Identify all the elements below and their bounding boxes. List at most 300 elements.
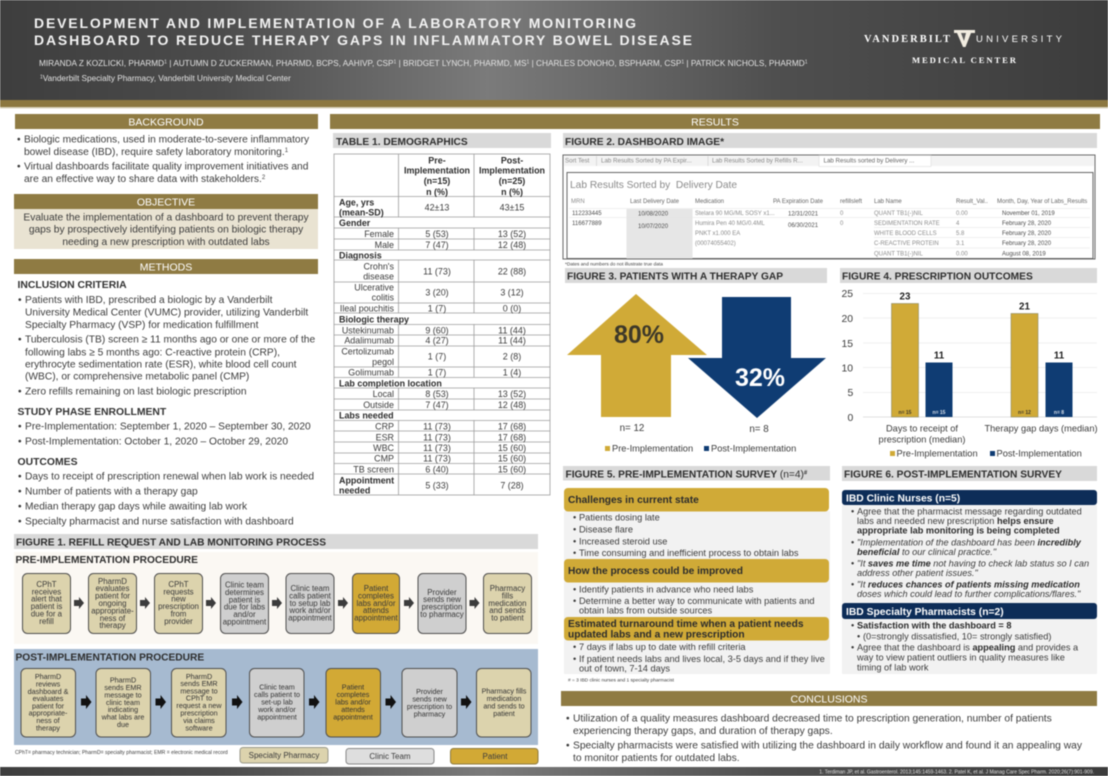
step 1: due for a bbox=[31, 610, 63, 618]
demographics table: colitis bbox=[372, 292, 395, 302]
arrow bbox=[404, 597, 414, 609]
demographics table: Labs needed bbox=[339, 410, 394, 420]
step 6: sends new bbox=[412, 694, 447, 703]
demographics table: TB screen bbox=[353, 464, 394, 474]
dashboard screenshot: 12/31/2021 bbox=[788, 212, 819, 218]
dashboard screenshot: 0.00 bbox=[956, 211, 968, 217]
step 1: reviews bbox=[36, 679, 61, 688]
demographics table: 4 (27) bbox=[425, 336, 449, 346]
study phase list: Pre-Implementation: September 1, 2020 – September 30, 2020 bbox=[25, 422, 311, 432]
step 3 bbox=[154, 574, 202, 634]
step 6: appointment bbox=[354, 614, 399, 623]
objective text: Evaluate the implementation of a dashboard to prevent therapy bbox=[23, 212, 309, 224]
step 3: via claims bbox=[183, 716, 215, 725]
arrow bbox=[232, 695, 242, 709]
demographics table: (mean-SD) bbox=[339, 208, 384, 218]
authors: 1 bbox=[527, 60, 530, 66]
background text: Virtual dashboards facilitate quality improvement initiatives and bbox=[24, 162, 309, 172]
demographics table: pegol bbox=[372, 357, 394, 367]
band: improvement bbox=[564, 559, 829, 582]
step 6: prescription to bbox=[407, 702, 452, 711]
step 1 bbox=[22, 574, 70, 634]
arrow bbox=[206, 597, 216, 609]
arrow bbox=[74, 597, 84, 609]
clinic nurses feedback: "It saves me time not having to check lab status so I can bbox=[857, 558, 1089, 568]
authors: 1 bbox=[681, 60, 684, 66]
bar chart: 25 bbox=[842, 289, 853, 300]
demographics table: WBC bbox=[373, 443, 395, 453]
step 4: Clinic team bbox=[225, 580, 264, 590]
heading: background: BACKGROUND bbox=[128, 116, 204, 128]
improvement list: • bbox=[573, 584, 576, 594]
demographics table: 17 (68) bbox=[498, 432, 526, 442]
dashboard screenshot: February 28, 2020 bbox=[1002, 241, 1052, 247]
demographics table: 7 (28) bbox=[500, 480, 524, 490]
turnaround list: out of town, 7-14 days bbox=[579, 664, 670, 674]
step 5: work and/or bbox=[288, 606, 331, 615]
dashboard screenshot: MRN bbox=[571, 199, 585, 205]
legend: process roles bbox=[240, 748, 538, 764]
panel: figure 4 prescription outcomes bbox=[840, 268, 1098, 458]
bar chart: 23 bbox=[900, 292, 911, 302]
step 1: appropriate- bbox=[29, 709, 68, 718]
bar chart: 20 bbox=[842, 314, 853, 325]
conclusions text: experiencing therapy gaps, and duration of therapy gaps. bbox=[573, 726, 833, 737]
challenges list: Disease flare bbox=[579, 524, 633, 534]
step 1: refill bbox=[39, 617, 54, 626]
clinic nurses feedback: "Implementation of the dashboard has been incredibly bbox=[857, 538, 1082, 548]
step 7: patient bbox=[493, 709, 515, 718]
heading: conclusions: CONCLUSIONS bbox=[790, 694, 868, 706]
clinic nurses feedback: • bbox=[851, 580, 854, 590]
outcomes list: Median therapy gap days while awaiting lab work bbox=[25, 502, 248, 512]
authors: | CHARLES DONOHO, BSPHARM, CSP bbox=[529, 59, 682, 68]
demographics table: n (%) bbox=[501, 187, 523, 197]
specialty pharmacists feedback: (0=strongly dissatisfied, 10= strongly satisfied) bbox=[863, 632, 1051, 642]
legend: process roles: Clinic Team bbox=[369, 752, 411, 761]
step 3: CPhT bbox=[168, 580, 189, 589]
step 6: Patient bbox=[364, 584, 389, 593]
bar chart: prescription (median) bbox=[879, 434, 965, 444]
band: clinic nurses bbox=[842, 490, 1097, 505]
step 5: calls patient bbox=[289, 591, 332, 600]
heading: methods: METHODS bbox=[140, 262, 192, 274]
band: challenges: Challenges in current state bbox=[568, 495, 699, 506]
demographics table: 13 (52) bbox=[498, 389, 526, 399]
step 4: work and/or bbox=[257, 705, 296, 714]
demographics table: (n=25) bbox=[499, 176, 525, 186]
clinic nurses feedback: • bbox=[851, 506, 854, 516]
specialty pharmacists feedback: Satisfaction with the dashboard = 8 bbox=[857, 620, 1011, 630]
demographics table: 3 (12) bbox=[500, 288, 524, 298]
demographics table: 12 (48) bbox=[498, 240, 526, 250]
step 8 bbox=[484, 574, 532, 634]
step 5: appointment bbox=[288, 614, 333, 623]
inclusion criteria list: • bbox=[18, 386, 22, 398]
step 7: Pharmacy fills bbox=[482, 687, 527, 696]
demographics table: Pre- bbox=[428, 156, 446, 166]
affiliation: 1 bbox=[40, 74, 43, 80]
challenges list: Time consuming and inefficient process to obtain labs bbox=[579, 548, 799, 558]
bar chart: 5 bbox=[848, 388, 854, 399]
step 6: pharmacy bbox=[414, 709, 446, 718]
step 5 bbox=[286, 574, 334, 634]
bar chart: 10 bbox=[842, 364, 853, 374]
challenges list: • bbox=[573, 536, 576, 546]
dashboard screenshot: 5.8 bbox=[956, 231, 965, 237]
n label post: n= 8 bbox=[749, 424, 769, 435]
turnaround list: 7 days if labs up to date with refill criteria bbox=[579, 642, 746, 652]
demographics table: (n=15) bbox=[424, 176, 450, 186]
legend: figure 4: Pre-Implementation bbox=[896, 448, 978, 458]
panel: results heading bbox=[330, 114, 1100, 129]
dashboard screenshot: Last Delivery Date bbox=[630, 199, 680, 205]
bar chart: n= 8 bbox=[1054, 410, 1064, 416]
challenges list bbox=[573, 512, 799, 558]
step 8: to patient bbox=[491, 614, 525, 623]
conclusions text: Utilization of a quality measures dashboard decreased time to prescription generation, number of patients bbox=[573, 714, 1052, 724]
step 1: evaluates bbox=[33, 694, 64, 703]
arrow bbox=[272, 597, 282, 609]
step 1: patient for bbox=[32, 701, 65, 710]
title bbox=[34, 15, 692, 48]
logo: Vanderbilt University Medical Center: MEDICAL CENTER bbox=[912, 55, 1017, 65]
background text: • bbox=[17, 134, 21, 146]
demographics table: 9 (60) bbox=[425, 326, 449, 336]
demographics table: 11 (73) bbox=[423, 443, 451, 453]
dashboard screenshot: Lab Results Sorted by Refills R... bbox=[712, 158, 803, 164]
dashboard screenshot: Lab Results Sorted by Delivery Date bbox=[570, 180, 737, 191]
objective text: gaps by prospectively identifying patients on biologic therapy bbox=[29, 224, 304, 236]
step 4: Clinic team bbox=[259, 683, 295, 692]
dashboard footnote: *Dates and numbers do not illustrate true data bbox=[565, 262, 663, 268]
dashboard screenshot: February 28, 2020 bbox=[1002, 231, 1052, 237]
panel: figure 2 dashboard image bbox=[563, 133, 1097, 268]
title: DEVELOPMENT AND IMPLEMENTATION OF A LABORATORY MONITORING bbox=[34, 15, 636, 31]
background text: • bbox=[17, 162, 21, 172]
survey footnote: # = 3 IBD clinic nurses and 1 specialty pharmacist bbox=[568, 678, 675, 684]
demographics table: 1 (7) bbox=[428, 352, 446, 362]
step 4: set-up lab bbox=[261, 698, 293, 707]
demographics table: 15 (60) bbox=[498, 443, 526, 453]
panel: figure 3 patients with a therapy gap bbox=[565, 268, 827, 454]
affiliation: Vanderbilt Specialty Pharmacy, Vanderbilt University Medical Center bbox=[43, 74, 291, 83]
demographics table: Implementation bbox=[404, 166, 470, 176]
panel: background bbox=[15, 114, 318, 185]
conclusions text: to monitor patients for outdated labs. bbox=[573, 753, 740, 764]
arrow bbox=[386, 695, 396, 709]
demographics table: 43±15 bbox=[500, 202, 524, 212]
step 3: prescription bbox=[180, 708, 218, 718]
step 2: what labs are bbox=[101, 713, 144, 722]
heading: figure 3: FIGURE 3. PATIENTS WITH A THERAPY GAP bbox=[567, 272, 783, 282]
step 3: prescription bbox=[158, 602, 199, 611]
inclusion criteria list: (WBC), or comprehensive metabolic panel (CMP) bbox=[25, 372, 249, 382]
background text: Biologic medications, used in moderate-to-severe inflammatory bbox=[24, 134, 310, 146]
step 7 bbox=[418, 574, 466, 634]
step 2 bbox=[96, 668, 150, 737]
logo: Vanderbilt University Medical Center: VANDERBILT bbox=[864, 34, 950, 45]
demographics table: 7 (47) bbox=[425, 240, 449, 250]
step 1: ness of bbox=[36, 716, 60, 725]
step 5: appointment bbox=[333, 713, 373, 722]
step 4: determines bbox=[225, 588, 264, 597]
clinic nurses feedback: • bbox=[851, 558, 854, 568]
authors: 1 bbox=[394, 60, 397, 66]
outcomes list: Specialty pharmacist and nurse satisfaction with dashboard bbox=[25, 516, 294, 528]
inclusion criteria heading: INCLUSION CRITERIA bbox=[18, 280, 127, 291]
turnaround list: If patient needs labs and lives local, 3-5 days and if they live bbox=[579, 654, 825, 664]
icon: down arrow post-implementation 32% bbox=[688, 297, 826, 418]
demographics table: CRP bbox=[375, 422, 394, 432]
arrow bbox=[461, 695, 472, 709]
arrow bbox=[338, 597, 348, 609]
demographics table: 3 (20) bbox=[425, 288, 449, 298]
step 2: PharmD bbox=[98, 577, 127, 586]
band: challenges bbox=[564, 488, 829, 512]
demographics table: Adalimumab bbox=[344, 336, 394, 346]
legend: figure 3: Pre-Implementation bbox=[612, 444, 693, 454]
dashboard screenshot: refillsleft bbox=[840, 199, 862, 205]
clinic nurses feedback: labs and needed new prescription helps ensure bbox=[857, 516, 1054, 526]
demographics table: Male bbox=[375, 240, 394, 250]
outcomes list: • bbox=[18, 486, 22, 498]
authors: | PATRICK NICHOLS, PHARMD bbox=[684, 59, 805, 68]
outcomes list: • bbox=[18, 502, 22, 512]
demographics table: Lab completion location bbox=[339, 378, 442, 388]
demographics table: 6 (40) bbox=[425, 464, 449, 474]
step 3: PharmD bbox=[186, 672, 212, 681]
dashboard screenshot: QUANT TB1(-)NIL bbox=[874, 252, 923, 258]
panel: pre-implementation procedure bbox=[14, 552, 538, 644]
step 3: from bbox=[171, 610, 187, 618]
heading: figure 5: FIGURE 5. PRE-IMPLEMENTATION SURVEY (n=4) bbox=[566, 470, 804, 480]
band: turnaround: Estimated turnaround time when a patient needs bbox=[568, 619, 804, 630]
authors: MIRANDA Z KOZLICKI, PHARMD bbox=[39, 59, 164, 68]
demographics table: Golimumab bbox=[348, 368, 394, 378]
arrow bbox=[156, 695, 166, 709]
header banner bbox=[0, 0, 1108, 108]
step 3: message to bbox=[180, 686, 218, 695]
step 7 bbox=[476, 668, 531, 737]
step 2 bbox=[88, 574, 136, 634]
heading: post-implementation: POST-IMPLEMENTATION PROCEDURE bbox=[16, 652, 204, 664]
step 8: medication bbox=[488, 599, 527, 608]
background text: bowel disease (IBD), require safety laboratory monitoring. bbox=[24, 147, 285, 158]
dashboard screenshot: C-REACTIVE PROTEIN bbox=[874, 241, 939, 247]
dashboard screenshot: 112233445 bbox=[572, 211, 602, 217]
step 4: due for labs bbox=[224, 603, 265, 612]
dashboard screenshot bbox=[563, 155, 1095, 259]
clinic nurses feedback: beneficial to our clinical practice." bbox=[857, 547, 997, 557]
demographics table: Certolizumab bbox=[341, 346, 394, 356]
step 8: fills bbox=[502, 591, 513, 600]
step 1: patient is bbox=[31, 602, 62, 611]
demographics table: Ulcerative bbox=[354, 282, 394, 292]
demographics table: 7 (47) bbox=[425, 400, 449, 410]
legend: figure 3: Post-Implementation bbox=[711, 444, 796, 454]
legend: figure 3 bbox=[605, 444, 796, 454]
demographics table: 12 (48) bbox=[498, 400, 526, 410]
step 5: attends bbox=[341, 705, 365, 714]
dashboard screenshot: Medication bbox=[695, 199, 724, 205]
improvement list: Identify patients in advance who need labs bbox=[579, 584, 754, 594]
inclusion criteria list: • bbox=[18, 334, 22, 346]
dashboard screenshot: Lab Name bbox=[874, 199, 902, 205]
demographics table: Ileal pouchitis bbox=[340, 304, 395, 314]
challenges list: Patients dosing late bbox=[579, 512, 660, 522]
panel: figure 6 post-implementation survey bbox=[842, 466, 1097, 674]
dashboard screenshot: QUANT TB1(-)NIL bbox=[874, 211, 923, 217]
demographics table: CMP bbox=[374, 454, 394, 464]
improvement list bbox=[573, 584, 814, 616]
authors: | AUTUMN D ZUCKERMAN, PHARMD, BCPS, AAHIVP, CSP bbox=[167, 59, 394, 68]
demographics table: Local bbox=[373, 389, 394, 399]
demographics table: 5 (33) bbox=[425, 480, 449, 490]
step 2: therapy bbox=[99, 621, 126, 630]
demographics table: Crohn's bbox=[363, 262, 395, 272]
improvement list: obtain labs from outside sources bbox=[579, 606, 713, 616]
step 3: sends EMR bbox=[180, 679, 218, 688]
bar chart: n= 15 bbox=[899, 410, 912, 416]
step 7: medication bbox=[487, 694, 521, 703]
demographics table: 5 (53) bbox=[425, 229, 449, 239]
background text: are an effective way to share data with stakeholders. bbox=[24, 174, 262, 185]
dashboard screenshot: November 01, 2019 bbox=[1002, 211, 1055, 217]
conclusions text: • bbox=[566, 714, 570, 724]
demographics table: 11 (73) bbox=[423, 454, 451, 464]
turnaround list bbox=[573, 642, 825, 674]
bar chart: n= 12 bbox=[1018, 410, 1031, 416]
heading: figure 4: FIGURE 4. PRESCRIPTION OUTCOMES bbox=[842, 272, 1033, 282]
dashboard screenshot: 0 bbox=[840, 221, 844, 227]
demographics table: Age, yrs bbox=[339, 198, 374, 208]
step 3: software bbox=[185, 723, 213, 732]
footer with references bbox=[0, 767, 1108, 776]
band: clinic nurses: IBD Clinic Nurses (n=5) bbox=[846, 494, 960, 504]
improvement list: • bbox=[573, 596, 576, 606]
arrow bbox=[81, 695, 92, 709]
dashboard screenshot: Stelara 90 MG/ML SOSY x1... bbox=[695, 211, 775, 217]
panel: figure 1 refill process bbox=[14, 534, 538, 764]
step 4 bbox=[220, 574, 268, 634]
objective text: needing a new prescription with outdated labs bbox=[62, 237, 270, 248]
panel: post-implementation procedure bbox=[14, 649, 538, 745]
band: improvement: How the process could be improved bbox=[568, 566, 743, 577]
legend: figure 4 bbox=[890, 448, 1082, 458]
step 2: clinic team bbox=[106, 698, 140, 707]
demographics table: 1 (4) bbox=[503, 368, 521, 378]
conclusions text bbox=[566, 714, 1083, 764]
outcomes list: • bbox=[18, 516, 22, 528]
demographics table: 15 (60) bbox=[498, 464, 526, 474]
panel: objective bbox=[14, 194, 318, 249]
demographics table: n (%) bbox=[426, 187, 448, 197]
band: specialty pharmacists: IBD Specialty Pharmacists (n=2) bbox=[846, 607, 1004, 618]
dashboard screenshot: 116677889 bbox=[572, 221, 602, 227]
dashboard screenshot: August 08, 2019 bbox=[1002, 252, 1046, 258]
step 8: Pharmacy bbox=[490, 584, 525, 593]
specialty pharmacists feedback: • bbox=[857, 632, 860, 642]
specialty pharmacists feedback: way to view patient outliers in quality measures like bbox=[856, 652, 1065, 662]
demographics table: 11 (44) bbox=[498, 326, 526, 336]
demographics table: 8 (53) bbox=[425, 389, 449, 399]
logo: Vanderbilt University Medical Center: UNIVERSITY bbox=[976, 34, 1063, 45]
dashboard screenshot: PNKT x1.000 EA bbox=[695, 231, 740, 237]
demographics table: Appointment bbox=[339, 476, 394, 486]
demographics table: Outside bbox=[363, 400, 394, 410]
arrow bbox=[140, 597, 150, 609]
specialty pharmacists feedback: • bbox=[851, 642, 854, 652]
demographics table: 22 (88) bbox=[498, 266, 526, 276]
legend: process roles: Specialty Pharmacy bbox=[249, 751, 319, 760]
background text: 1 bbox=[285, 148, 289, 154]
dashboard screenshot: Lab Results Sorted by PA Expir... bbox=[601, 158, 692, 164]
inclusion criteria list: • bbox=[18, 295, 22, 306]
inclusion criteria list: following labs ≥ 5 months ago: C-reactive protein (CRP), bbox=[25, 348, 280, 358]
heading: objective: OBJECTIVE bbox=[137, 196, 195, 208]
bar chart: 11 bbox=[1054, 350, 1065, 362]
authors: 1 bbox=[805, 60, 808, 66]
demographics table: 11 (73) bbox=[423, 432, 451, 442]
demographics table: ESR bbox=[376, 432, 395, 442]
step 1: alert that bbox=[31, 595, 63, 604]
turnaround list: • bbox=[573, 642, 576, 652]
step 7: sends new bbox=[423, 595, 461, 604]
logo: Vanderbilt University Medical Center bbox=[864, 30, 1063, 65]
heading: figure 5: # bbox=[804, 470, 808, 476]
inclusion criteria list: University Medical Center (VUMC) provider, utilizing Vanderbilt bbox=[25, 308, 308, 318]
specialty pharmacists feedback: Agree that the dashboard is appealing and provides a bbox=[857, 642, 1079, 652]
panel: conclusions bbox=[561, 691, 1097, 764]
specialty pharmacists feedback: timing of lab work bbox=[857, 662, 929, 672]
step 1 bbox=[21, 668, 76, 737]
step 4: and/or bbox=[233, 610, 256, 619]
step 7: Provider bbox=[427, 588, 457, 597]
improvement list: Determine a better way to communicate with patients and bbox=[579, 596, 814, 606]
arrow bbox=[470, 597, 480, 609]
bar chart: n= 15 bbox=[933, 410, 946, 416]
footer with references: 1. Terdiman JP, et al. Gastroenterol. 2013;145:1459-1463. 2. Patel K, et al. J Manag Care Spec Pharm. 2020;26(7):901-909. bbox=[819, 770, 1094, 776]
step 2: message to bbox=[104, 690, 142, 699]
heading: figure 6: FIGURE 6. POST-IMPLEMENTATION SURVEY bbox=[844, 470, 1062, 480]
clinic nurses feedback: Agree that the pharmacist message regarding outdated bbox=[857, 506, 1082, 516]
demographics table: 0 (0) bbox=[503, 304, 521, 314]
demographics table: 13 (52) bbox=[498, 229, 526, 239]
study phase list: • bbox=[18, 436, 22, 448]
outcomes list bbox=[18, 472, 314, 528]
demographics table: 11 (73) bbox=[423, 422, 451, 432]
step 5: Patient bbox=[342, 683, 364, 692]
step 3: new bbox=[171, 595, 186, 604]
turnaround list: • bbox=[573, 654, 576, 664]
study phase list: • bbox=[18, 422, 22, 432]
demographics table: disease bbox=[363, 272, 394, 282]
step 2: sends EMR bbox=[104, 683, 142, 692]
demographics table: 17 (68) bbox=[498, 422, 526, 432]
bar chart: 21 bbox=[1019, 302, 1030, 312]
challenges list: Increased steroid use bbox=[579, 536, 667, 546]
n label pre: n= 12 bbox=[620, 423, 644, 434]
step 5: to setup lab bbox=[290, 599, 331, 608]
dashboard screenshot: 4 bbox=[956, 221, 960, 227]
panel: table 1 demographics bbox=[333, 133, 551, 496]
heading: figure 1: FIGURE 1. REFILL REQUEST AND LAB MONITORING PROCESS bbox=[16, 538, 326, 548]
step 2: ongoing bbox=[98, 599, 127, 608]
step 6 bbox=[402, 668, 457, 737]
step 2: indicating bbox=[108, 705, 138, 714]
step 6: attends bbox=[363, 606, 389, 615]
